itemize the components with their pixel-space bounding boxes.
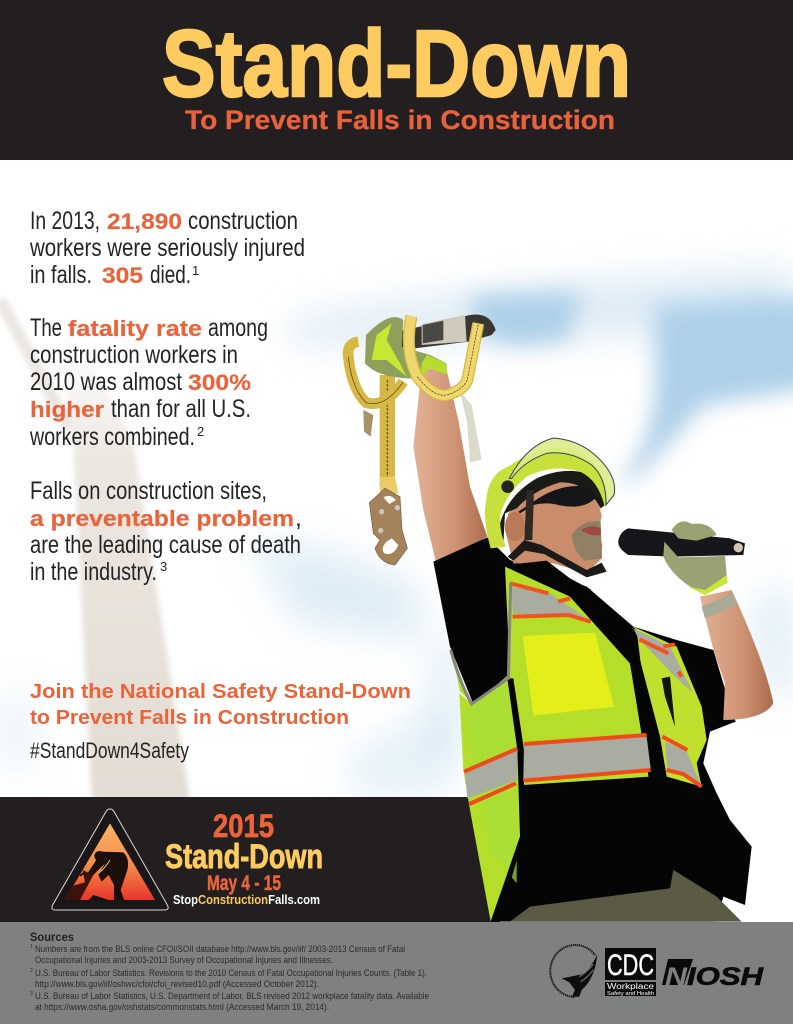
text block: fatality rate: than for all U.S.	[111, 395, 251, 423]
text block: injuries: In 2013,	[30, 207, 100, 235]
ear	[505, 512, 525, 541]
logo: NIOSH	[662, 959, 764, 991]
head and helmet	[485, 438, 615, 590]
source notes: http://www.bls.gov/iif/oshwc/cfoi/cfoi_revised10.pdf (Accessed October 2012).	[35, 978, 319, 989]
logo: NIOSH: IOSH	[687, 963, 764, 991]
source notes: U.S. Bureau of Labor Statistics. Revisions to the 2010 Census of Fatal Occupational Injuries Counts. (Table 1).	[35, 967, 427, 978]
text block: preventable problem: Falls on construction sites,	[30, 477, 267, 505]
call to action: to Prevent Falls in Construction	[30, 706, 349, 729]
high haze	[290, 268, 793, 345]
text block: fatality rate: 300%	[188, 370, 251, 395]
text block: injuries: died.	[150, 261, 191, 289]
text block: injuries: 21,890	[107, 209, 182, 234]
text block: preventable problem: in the industry.	[30, 558, 157, 586]
text block: preventable problem	[30, 477, 302, 586]
dark event band	[0, 797, 500, 922]
text block: fatality rate: fatality rate	[68, 316, 202, 341]
text block: injuries: in falls.	[30, 261, 92, 289]
main vest	[459, 567, 650, 922]
text block: fatality rate	[29, 314, 268, 451]
microphone and hand	[618, 521, 745, 618]
reflective shoulder bands	[510, 587, 693, 693]
goatee and mouth	[572, 521, 602, 561]
collar	[512, 561, 592, 590]
grip handle	[398, 314, 496, 350]
helmet brim	[498, 471, 605, 545]
source notes: U.S. Bureau of Labor Statistics, U.S. Department of Labor. BLS revised 2012 workplace fatality data. Available	[35, 990, 429, 1001]
sleeve trim	[451, 583, 511, 704]
source notes: 2	[30, 968, 33, 974]
right arm	[700, 590, 773, 720]
black side seam	[491, 678, 524, 922]
text block: fatality rate: 2010 was almost	[30, 368, 182, 396]
sources footer	[0, 922, 793, 1024]
chest pocket	[523, 633, 614, 716]
text block: fatality rate: higher	[30, 397, 104, 422]
icon: warning triangle with worker	[52, 809, 168, 910]
logo: CDC	[605, 948, 656, 997]
front strap loop	[409, 316, 478, 395]
source notes: at https://www.osha.gov/oshstats/commonstats.html (Accessed March 19, 2014).	[35, 1001, 329, 1012]
logo: CDC: CDC	[607, 949, 654, 982]
helmet straps	[524, 490, 534, 540]
title: Stand-Down	[162, 11, 631, 117]
source notes: 1	[30, 944, 33, 950]
text block: fatality rate: construction workers in	[30, 341, 238, 369]
event name: Stand-Down	[165, 838, 323, 876]
tower silhouette	[68, 370, 192, 797]
sunglasses	[518, 486, 603, 513]
source notes: Numbers are from the BLS online CFOI/SOII database http://www.bls.gov/iif/ 2003-2013 Census of Fatal	[35, 943, 405, 954]
snap hook	[369, 488, 407, 565]
event website: StopConstructionFalls.com	[173, 893, 320, 907]
header band	[0, 0, 793, 160]
text block: fatality rate: The	[30, 314, 62, 342]
helmet shell	[485, 447, 607, 548]
text block: fatality rate: workers combined.	[29, 423, 195, 451]
glove	[663, 521, 727, 595]
worker photo	[348, 314, 773, 922]
call to action: Join the National Safety Stand-Down	[30, 680, 411, 703]
hanging strap	[364, 375, 410, 487]
reflective waist bands	[465, 737, 702, 798]
logo: NIOSH: N	[665, 963, 688, 991]
logo: HHS eagle	[550, 945, 597, 997]
subtitle: To Prevent Falls in Construction	[185, 105, 615, 135]
sky background photo	[0, 258, 793, 797]
raised arm	[413, 368, 487, 565]
logo: CDC: Workplace	[607, 982, 655, 991]
sources heading: Sources	[30, 932, 74, 944]
left strap loop	[363, 410, 373, 437]
event dates: May 4 - 15	[207, 872, 281, 895]
source notes: 3	[30, 991, 33, 997]
text block: injuries: workers were seriously injured	[29, 234, 305, 262]
text block: preventable problem: are the leading cause of death	[30, 531, 301, 559]
text block: preventable problem: 3	[160, 559, 167, 574]
soft pale cloud shadows	[0, 545, 793, 795]
call to action	[30, 680, 411, 729]
visor	[509, 438, 615, 505]
neck and face	[505, 482, 602, 573]
text block: preventable problem: a preventable problem	[30, 506, 294, 531]
text block: fatality rate: among	[208, 314, 268, 342]
pants	[510, 870, 742, 922]
source notes: Occupational Injuries and 2003-2013 Survey of Occupational Injuries and Illnesses.	[35, 954, 333, 965]
torso, vest and sleeves	[433, 537, 773, 922]
text block: fatality rate: 2	[197, 424, 204, 439]
event year: 2015	[213, 808, 274, 844]
text block: injuries: 1	[192, 263, 199, 278]
text block: injuries	[29, 207, 305, 289]
watch	[702, 593, 737, 618]
text block: preventable problem: ,	[295, 504, 302, 532]
source notes	[30, 943, 429, 1012]
logo: CDC: Safety and Health	[607, 991, 654, 997]
right vest panel	[633, 627, 707, 787]
black placket	[570, 587, 667, 803]
lanyard and raised hand	[348, 314, 496, 565]
text block: injuries: 305	[102, 263, 143, 288]
hashtag: #StandDown4Safety	[30, 738, 189, 763]
text block: injuries: construction	[188, 207, 298, 235]
tag	[460, 392, 482, 462]
glove	[365, 317, 447, 378]
blue sky patches	[470, 292, 793, 490]
